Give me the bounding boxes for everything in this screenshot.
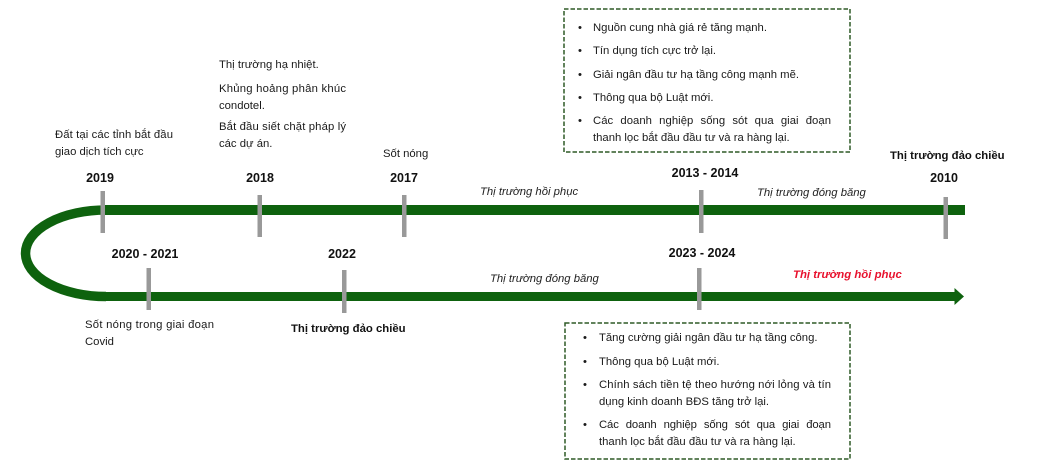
year labels: 2023 - 2024 (669, 246, 735, 260)
note: 2020-2021 (85, 319, 214, 348)
phase labels (480, 186, 867, 285)
milestone ticks (100, 190, 948, 313)
panel: 2023-2024 drivers: Các doanh nghiệp sống sót qua giai đoạn (599, 419, 831, 431)
year labels (86, 166, 958, 261)
note: 2017: Sốt nóng (383, 148, 428, 160)
phase labels: Thị trường hồi phục (480, 186, 578, 198)
panel: 2023-2024 drivers: Chính sách tiền tệ theo hướng nới lỏng và tín (599, 379, 831, 391)
panel: 2023-2024 drivers: • (583, 419, 587, 431)
panel: 2023-2024 drivers: • (583, 356, 587, 368)
note: 2019 (55, 128, 173, 158)
year labels: 2017 (390, 171, 418, 185)
panel: 2023-2024 drivers: thanh lọc bắt đầu đầu tư và ra hàng lại. (599, 435, 796, 448)
panel: 2023-2024 drivers: Tăng cường giải ngân đầu tư hạ tầng công. (599, 332, 818, 344)
panel: 2013-2014 drivers: Tín dụng tích cực trở lại. (593, 45, 716, 57)
panel: 2023-2024 drivers: • (583, 379, 587, 391)
year labels: 2018 (246, 171, 274, 185)
year labels: 2020 - 2021 (112, 247, 178, 261)
note: 2019: Đất tại các tỉnh bắt đầu (55, 128, 173, 141)
phase label: recovery highlighted: Thị trường hồi phục (793, 269, 902, 281)
panel: 2013-2014 drivers: thanh lọc bắt đầu đầu tư và ra hàng lại. (593, 131, 790, 144)
panel: 2023-2024 drivers: Thông qua bộ Luật mới. (599, 356, 719, 368)
panel: 2013-2014 drivers: Các doanh nghiệp sống sót qua giai đoạn (593, 115, 831, 127)
panel: 2013-2014 drivers: • (578, 45, 582, 57)
phase labels: Thị trường đóng băng (490, 273, 600, 285)
note: 2018: Bắt đầu siết chặt pháp lý (219, 120, 346, 133)
phase labels: Thị trường đóng băng (757, 187, 867, 199)
panel: 2013-2014 drivers: • (578, 115, 582, 127)
panel: 2013-2014 drivers: Nguồn cung nhà giá rẻ tăng mạnh. (593, 22, 767, 34)
year labels: 2022 (328, 247, 356, 261)
timeline: green track with arrow (26, 210, 965, 305)
panel: 2023-2024 drivers (565, 323, 850, 459)
panel: 2013-2014 drivers: • (578, 92, 582, 104)
note: 2020-2021: Covid (85, 336, 114, 348)
panel: 2023-2024 drivers: • (583, 332, 587, 344)
note: 2018: Thị trường hạ nhiệt. (219, 59, 319, 71)
panel: 2013-2014 drivers: Thông qua bộ Luật mới. (593, 92, 713, 104)
year labels: 2013 - 2014 (672, 166, 738, 180)
note: 2018: các dự án. (219, 138, 272, 150)
note: 2022: Thị trường đảo chiều (291, 323, 406, 335)
panel: 2013-2014 drivers (564, 9, 850, 152)
note: 2018: Khủng hoảng phân khúc (219, 83, 346, 95)
panel: 2013-2014 drivers: • (578, 69, 582, 81)
note: 2019: giao dịch tích cực (55, 146, 144, 158)
panel: 2013-2014 drivers: • (578, 22, 582, 34)
note: 2018: condotel. (219, 100, 265, 112)
year labels: 2019 (86, 171, 114, 185)
note: 2020-2021: Sốt nóng trong giai đoạn (85, 319, 214, 331)
panel: 2013-2014 drivers: Giải ngân đầu tư hạ tầng công mạnh mẽ. (593, 69, 799, 81)
note: 2018 (219, 59, 346, 150)
note: 2010: Thị trường đảo chiều (890, 150, 1005, 162)
panel: 2023-2024 drivers: dụng kinh doanh BĐS tăng trở lại. (599, 396, 769, 408)
year labels: 2010 (930, 171, 958, 185)
